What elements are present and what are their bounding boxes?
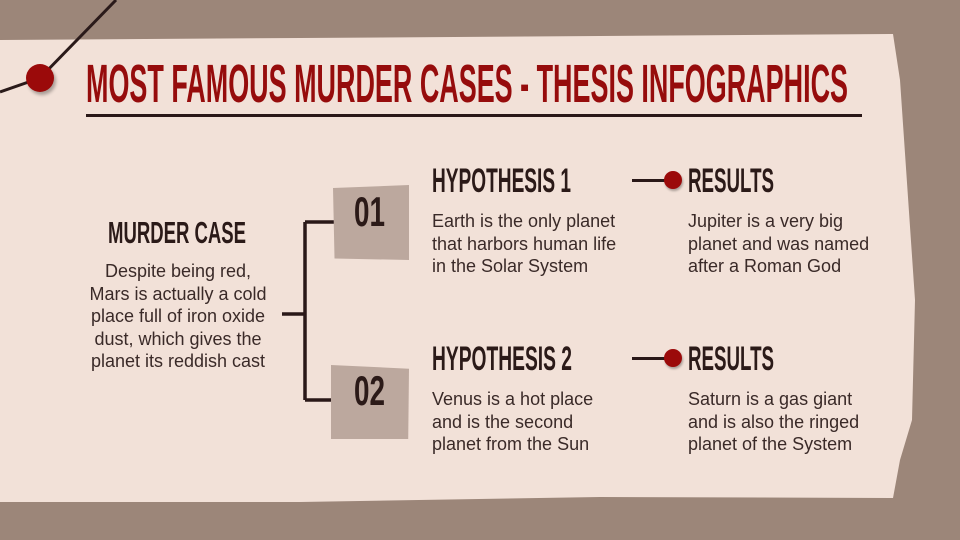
text: results 1: planet and was named (688, 234, 869, 254)
text: results 2: and is also the ringed (688, 412, 859, 432)
text: murder case (89, 261, 267, 371)
text: hypothesis 2 (432, 389, 593, 454)
text: murder case: Mars is actually a cold (89, 284, 267, 304)
panel: results 1 (688, 166, 869, 276)
text: hypothesis 2: and is the second (432, 412, 573, 432)
title underline (86, 114, 862, 117)
panel: hypothesis 2 (432, 344, 593, 454)
panel: results 2 (688, 344, 859, 454)
text: results 2 (688, 389, 859, 454)
text: hypothesis 1: that harbors human life (432, 234, 616, 254)
text: murder case: Despite being red, (105, 261, 251, 281)
text: murder case: place full of iron oxide (91, 306, 265, 326)
icon: red pin (26, 64, 54, 92)
text: murder case: planet its reddish cast (91, 351, 265, 371)
text: hypothesis 1: Earth is the only planet (432, 211, 615, 231)
box: 01 (333, 185, 409, 260)
text: hypothesis 1 (432, 211, 616, 276)
text: murder case: dust, which gives the (94, 328, 262, 348)
text: results 2: planet of the System (688, 434, 852, 454)
text: hypothesis 2: Venus is a hot place (432, 389, 593, 409)
text: results 1: after a Roman God (688, 256, 841, 276)
box: 02 (331, 365, 409, 439)
connector: results 1 (632, 171, 684, 192)
text: results 1 (688, 211, 869, 276)
text: results 2: Saturn is a gas giant (688, 389, 852, 409)
bracket connector (282, 220, 334, 402)
panel: murder case (89, 215, 267, 371)
connector: results 2 (632, 349, 684, 370)
text: results 1: Jupiter is a very big (688, 211, 843, 231)
text: hypothesis 2: planet from the Sun (432, 434, 589, 454)
text: hypothesis 1: in the Solar System (432, 256, 588, 276)
panel: hypothesis 1 (432, 166, 616, 276)
